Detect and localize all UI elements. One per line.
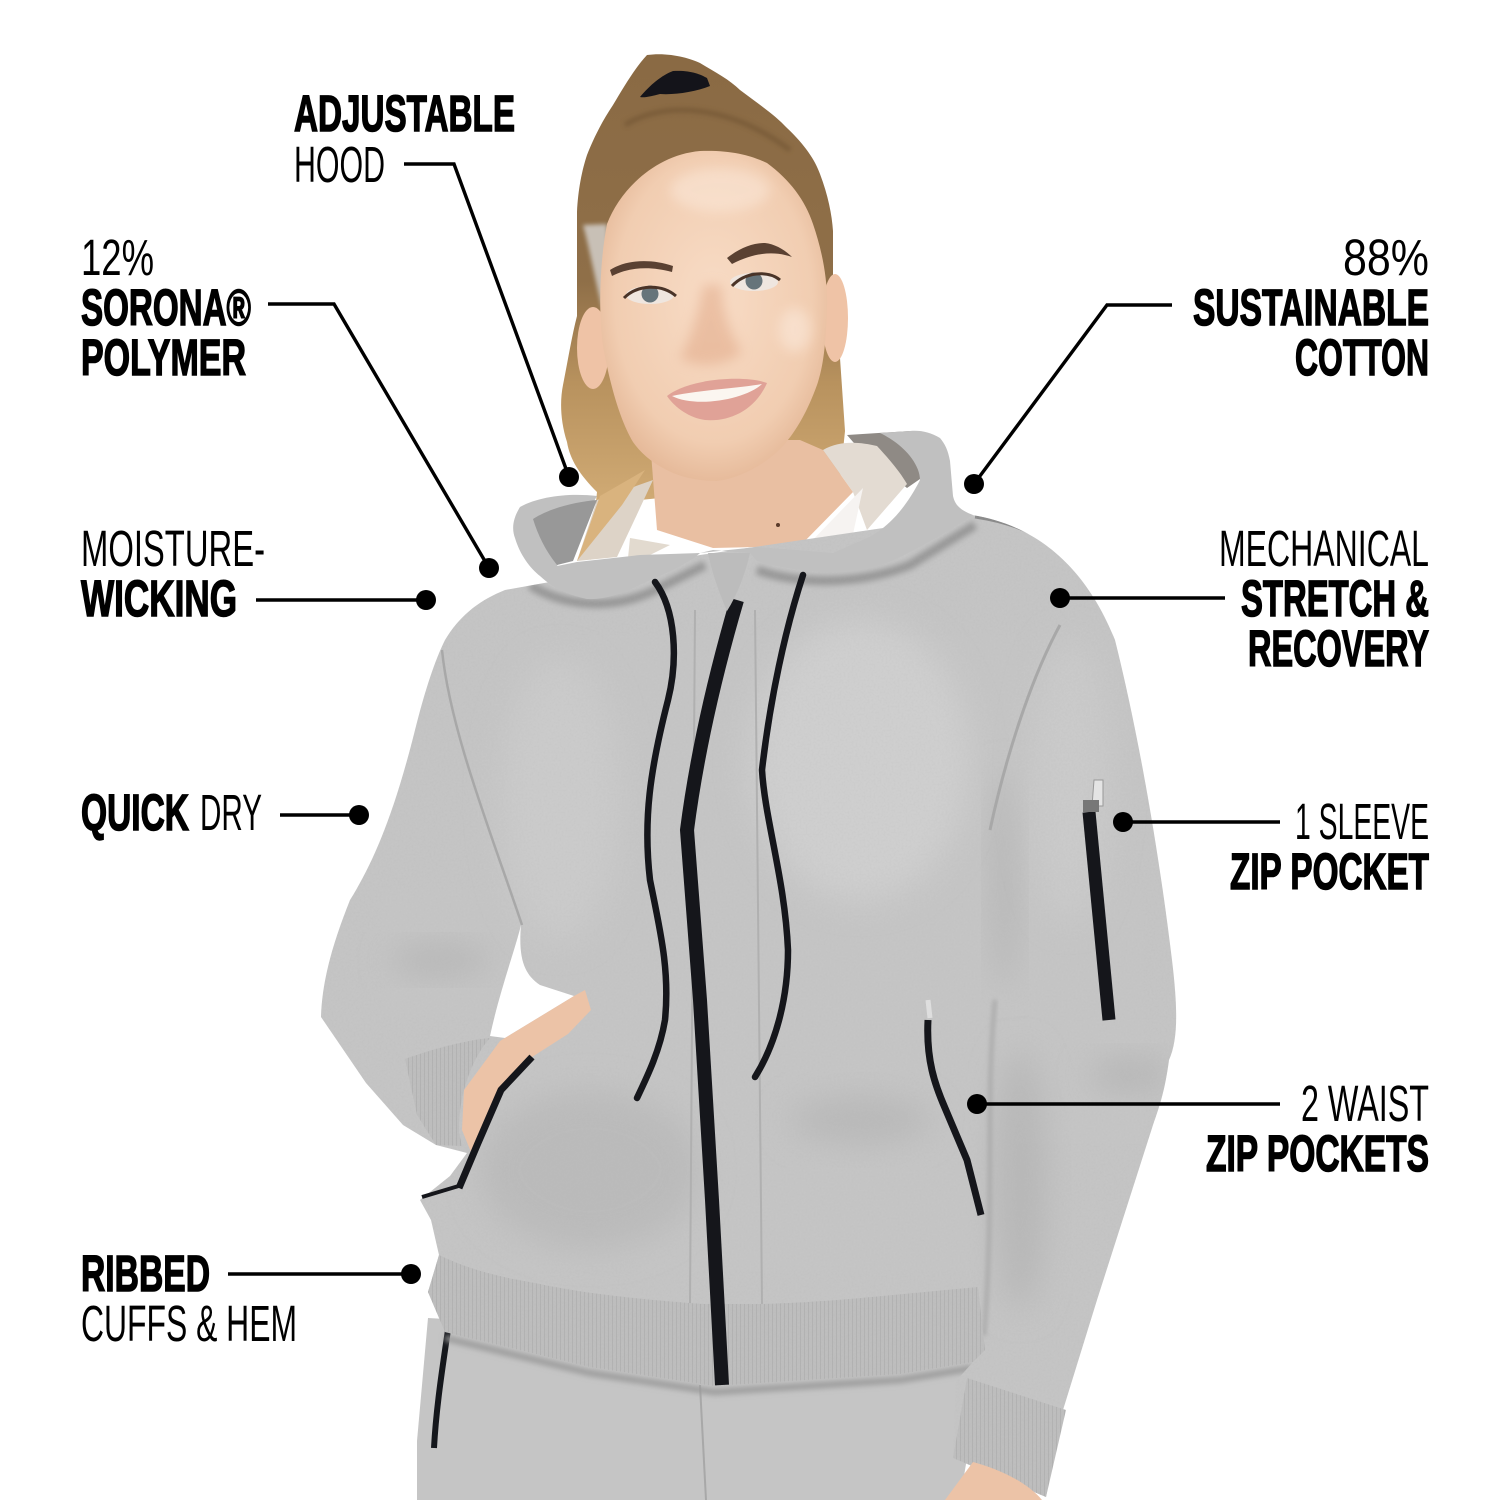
label: ribbed cuffs and hem: CUFFS & HEM xyxy=(81,1295,297,1352)
label: mechanical stretch and recovery xyxy=(1050,520,1429,677)
label: moisture-wicking: WICKING xyxy=(81,570,237,627)
shadow under hem xyxy=(445,1338,973,1392)
hoodie body and sleeves xyxy=(321,515,1176,1497)
label: moisture-wicking: MOISTURE- xyxy=(81,520,265,577)
hood collar xyxy=(513,431,973,611)
sweatpants xyxy=(417,1318,985,1500)
left cuff xyxy=(405,1038,490,1146)
gap between arm and waist xyxy=(490,925,574,1038)
sleeve zip pocket xyxy=(1083,780,1109,1020)
label: adjustable hood: HOOD xyxy=(294,136,385,193)
label: 88% sustainable cotton xyxy=(964,229,1429,494)
right cuff xyxy=(953,1378,1066,1497)
label: 12% sorona polymer: POLYMER xyxy=(81,329,246,386)
label: quick dry: QUICK xyxy=(81,784,189,841)
label: 1 sleeve zip pocket xyxy=(1113,793,1429,900)
centre zipper xyxy=(687,600,737,1385)
hair and ponytail xyxy=(561,54,845,560)
left hand in pocket xyxy=(462,990,591,1157)
label: quick dry xyxy=(81,784,369,841)
label: moisture-wicking xyxy=(81,520,436,627)
label: ribbed cuffs and hem: RIBBED xyxy=(81,1245,210,1302)
label: 2 waist zip pockets xyxy=(967,1075,1429,1182)
label: adjustable hood xyxy=(294,85,579,487)
label: 2 waist zip pockets: 2 WAIST xyxy=(1301,1075,1429,1132)
collar cast shadow xyxy=(530,525,975,604)
label: ribbed cuffs and hem xyxy=(81,1245,421,1352)
label: 12% sorona polymer: 12% xyxy=(81,229,154,286)
ears xyxy=(577,274,848,389)
right hand xyxy=(945,1462,1042,1500)
waist pocket zippers xyxy=(422,1000,981,1215)
hood lining xyxy=(577,431,940,561)
mole xyxy=(776,523,780,527)
neck xyxy=(650,440,853,548)
label: adjustable hood: ADJUSTABLE xyxy=(294,85,515,142)
hem rib xyxy=(428,1255,985,1386)
face xyxy=(600,151,827,481)
fabric shading xyxy=(390,517,1170,1336)
label: quick dry: DRY xyxy=(200,784,262,841)
label: 12% sorona polymer xyxy=(81,229,499,578)
hair strand over hood xyxy=(577,470,645,561)
heathered fabric texture xyxy=(310,500,1190,1500)
label: 12% sorona polymer: SORONA® xyxy=(81,279,251,336)
drawstrings xyxy=(637,575,803,1098)
label: 88% sustainable cotton: 88% xyxy=(1343,229,1429,286)
model wearing grey hoodie xyxy=(310,54,1190,1500)
